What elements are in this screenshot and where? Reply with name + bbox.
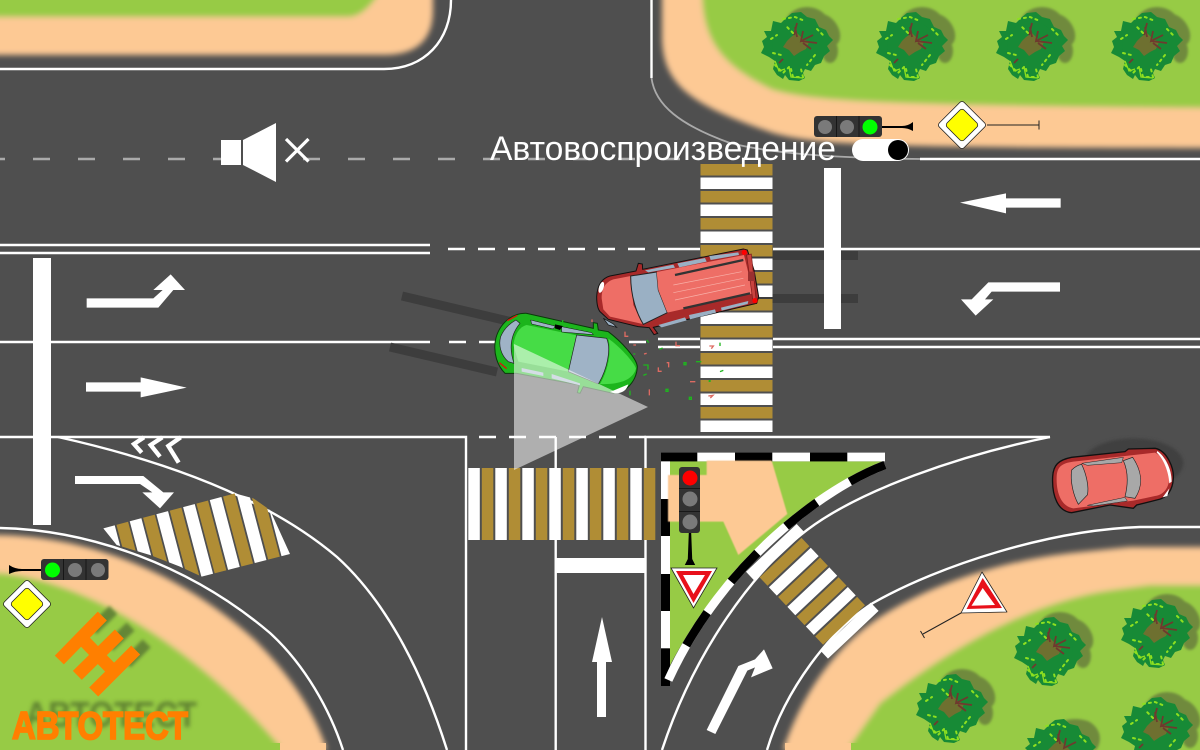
arrow: west then left xyxy=(961,282,1060,316)
logo text shadow: АВТОТЕСТ xyxy=(25,694,197,735)
arrow: straight west xyxy=(960,193,1061,213)
stop line: right xyxy=(824,168,841,329)
pedestrian crossing: bottom road xyxy=(468,468,655,540)
traffic light: top right (green) xyxy=(814,116,913,137)
autoplay toggle xyxy=(852,139,909,161)
priority road sign: top right xyxy=(937,100,1039,150)
autoplay label: Автовоспроизведение xyxy=(490,130,836,168)
yield sign: island xyxy=(671,568,717,608)
skid marks xyxy=(390,256,858,372)
chevrons at merge xyxy=(134,437,181,463)
stop line: left xyxy=(33,258,51,525)
speaker muted icon xyxy=(221,123,308,182)
arrow: north then right xyxy=(707,649,773,734)
collision debris xyxy=(563,319,723,399)
corner lawn: bottom right xyxy=(783,547,1200,750)
traffic island xyxy=(661,453,885,686)
traffic light: island (red) xyxy=(679,467,700,565)
island sand path xyxy=(668,461,787,555)
island lawn xyxy=(668,461,882,667)
priority road sign: bottom left xyxy=(2,579,52,629)
traffic light: bottom left (green) xyxy=(9,559,108,580)
yield sign: bottom right xyxy=(920,572,1007,638)
pedestrian crossing: right vertical road xyxy=(700,164,772,432)
stop line: bottom xyxy=(556,558,645,573)
logo mark xyxy=(59,610,147,692)
arrow: east then left xyxy=(87,274,185,308)
play button overlay xyxy=(514,344,648,470)
arrow: straight north xyxy=(592,617,612,717)
striped kerb xyxy=(661,453,885,686)
trees: top row xyxy=(761,7,1196,81)
pedestrian crossing: diagonal bottom right xyxy=(746,524,879,659)
corner lawn: bottom left xyxy=(0,535,327,750)
corner lawn: top right xyxy=(662,0,1200,148)
parked red coupe xyxy=(1053,438,1183,513)
trees: bottom right xyxy=(916,594,1200,750)
logo text: АВТОТЕСТ xyxy=(12,705,188,748)
corner lawn: top left xyxy=(0,0,433,55)
crashed green car xyxy=(495,313,637,393)
arrow: east then right xyxy=(75,476,174,508)
crashed red van xyxy=(597,249,759,335)
pedestrian crossing: left curved lane xyxy=(104,494,290,576)
arrow: straight east xyxy=(86,377,187,397)
